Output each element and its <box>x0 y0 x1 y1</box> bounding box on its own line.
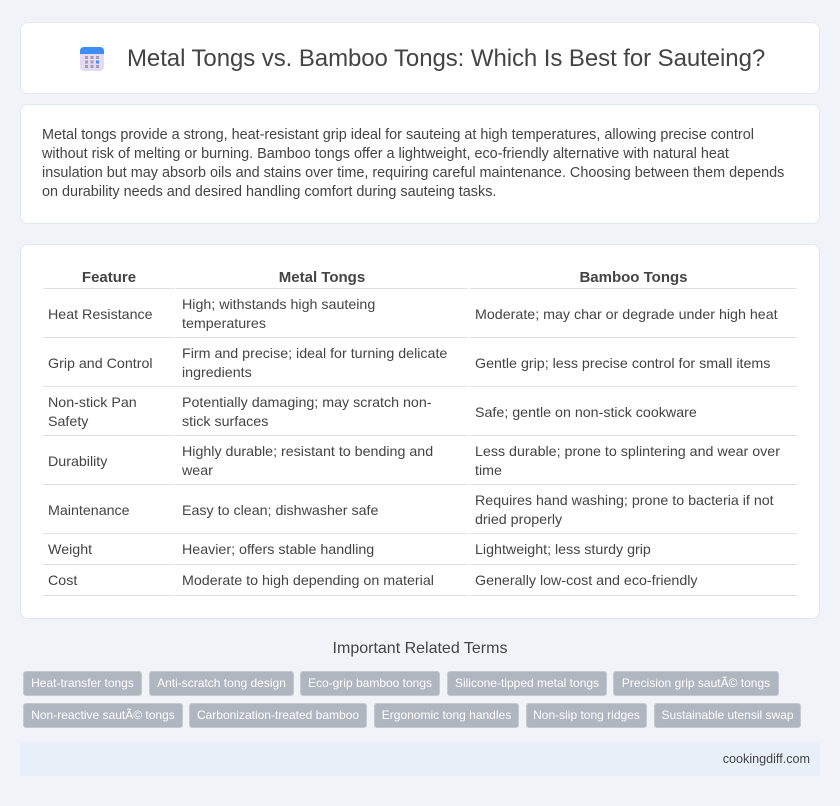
intro text <box>42 127 784 200</box>
row: non-stick pan safety: Potentially damaging; may scratch non- <box>182 395 432 411</box>
table header <box>82 269 688 286</box>
title panel <box>20 22 820 94</box>
row: maintenance: Requires hand washing; prone to bacteria if not <box>475 493 774 509</box>
row: maintenance: Easy to clean; dishwasher safe <box>182 503 378 519</box>
row: durability: Durability <box>48 454 107 470</box>
row: grip and control: Firm and precise; ideal for turning delicate <box>182 346 447 362</box>
row: non-stick pan safety: Safe; gentle on non-stick cookware <box>475 405 697 421</box>
intro text: Metal tongs provide a strong, heat-resistant grip ideal for sauteing at high temperatures, allowing precise control <box>42 127 754 143</box>
related terms tags: Heat-transfer tongs <box>31 676 134 690</box>
row: durability <box>48 444 780 479</box>
row: heat resistance <box>48 297 778 332</box>
row: non-stick pan safety: Safety <box>48 414 88 430</box>
intro text: insulation but may absorb oils and stains over time, requiring careful maintenance. Choosing between them depends <box>42 165 784 181</box>
intro panel <box>20 104 820 224</box>
related terms tags <box>23 671 801 728</box>
row: non-stick pan safety: Non-stick Pan <box>48 395 137 411</box>
table header: Bamboo Tongs <box>579 269 688 286</box>
row: weight: Heavier; offers stable handling <box>182 542 374 558</box>
row: weight: Lightweight; less sturdy grip <box>475 542 651 558</box>
row: maintenance: dried properly <box>475 512 562 528</box>
row: cost: Generally low-cost and eco-friendly <box>475 573 698 589</box>
row: durability: Less durable; prone to splintering and wear over <box>475 444 780 460</box>
row: cost <box>48 573 698 589</box>
related terms tags: Ergonomic tong handles <box>382 708 511 722</box>
intro text: on durability needs and desired handling comfort during sauteing tasks. <box>42 184 496 200</box>
related terms tags: Non-slip tong ridges <box>533 708 640 722</box>
related terms tags: Silicone-tipped metal tongs <box>455 676 599 690</box>
row: heat resistance: temperatures <box>182 316 266 332</box>
row: non-stick pan safety <box>48 395 697 430</box>
row: non-stick pan safety: stick surfaces <box>182 414 268 430</box>
related terms tags: Carbonization-treated bamboo <box>197 708 359 722</box>
comparison table panel <box>20 244 820 619</box>
icon: calendar <box>80 47 104 71</box>
source text: cookingdiff.com <box>723 752 810 766</box>
row: maintenance: Maintenance <box>48 503 130 519</box>
row: durability: time <box>475 463 502 479</box>
title: Metal Tongs vs. Bamboo Tongs: Which Is Best for Sauteing? <box>127 45 765 72</box>
related terms tags: Anti-scratch tong design <box>157 676 286 690</box>
row: heat resistance: High; withstands high sauteing <box>182 297 375 313</box>
intro text: without risk of melting or burning. Bamboo tongs offer a lightweight, eco-friendly alternative with natural heat <box>42 146 729 162</box>
row: heat resistance: Heat Resistance <box>48 307 153 323</box>
row: heat resistance: Moderate; may char or degrade under high heat <box>475 307 778 323</box>
row: weight <box>48 542 651 558</box>
row: grip and control: Gentle grip; less precise control for small items <box>475 356 770 372</box>
table header: Metal Tongs <box>279 269 365 286</box>
related terms tags: Eco-grip bamboo tongs <box>308 676 432 690</box>
row: cost: Cost <box>48 573 77 589</box>
row: grip and control: Grip and Control <box>48 356 153 372</box>
row: weight: Weight <box>48 542 92 558</box>
related terms tags: Sustainable utensil swap <box>661 708 794 722</box>
row: durability: Highly durable; resistant to bending and <box>182 444 433 460</box>
related terms tags: Non-reactive sautÃ© tongs <box>31 708 175 722</box>
table header: Feature <box>82 269 136 286</box>
related terms heading: Important Related Terms <box>333 640 507 657</box>
row: durability: wear <box>182 463 213 479</box>
footer bar <box>20 742 820 776</box>
row: cost: Moderate to high depending on material <box>182 573 434 589</box>
related terms tags: Precision grip sautÃ© tongs <box>622 676 770 690</box>
row: grip and control: ingredients <box>182 365 252 381</box>
row: grip and control <box>48 346 770 381</box>
row: maintenance <box>48 493 774 528</box>
